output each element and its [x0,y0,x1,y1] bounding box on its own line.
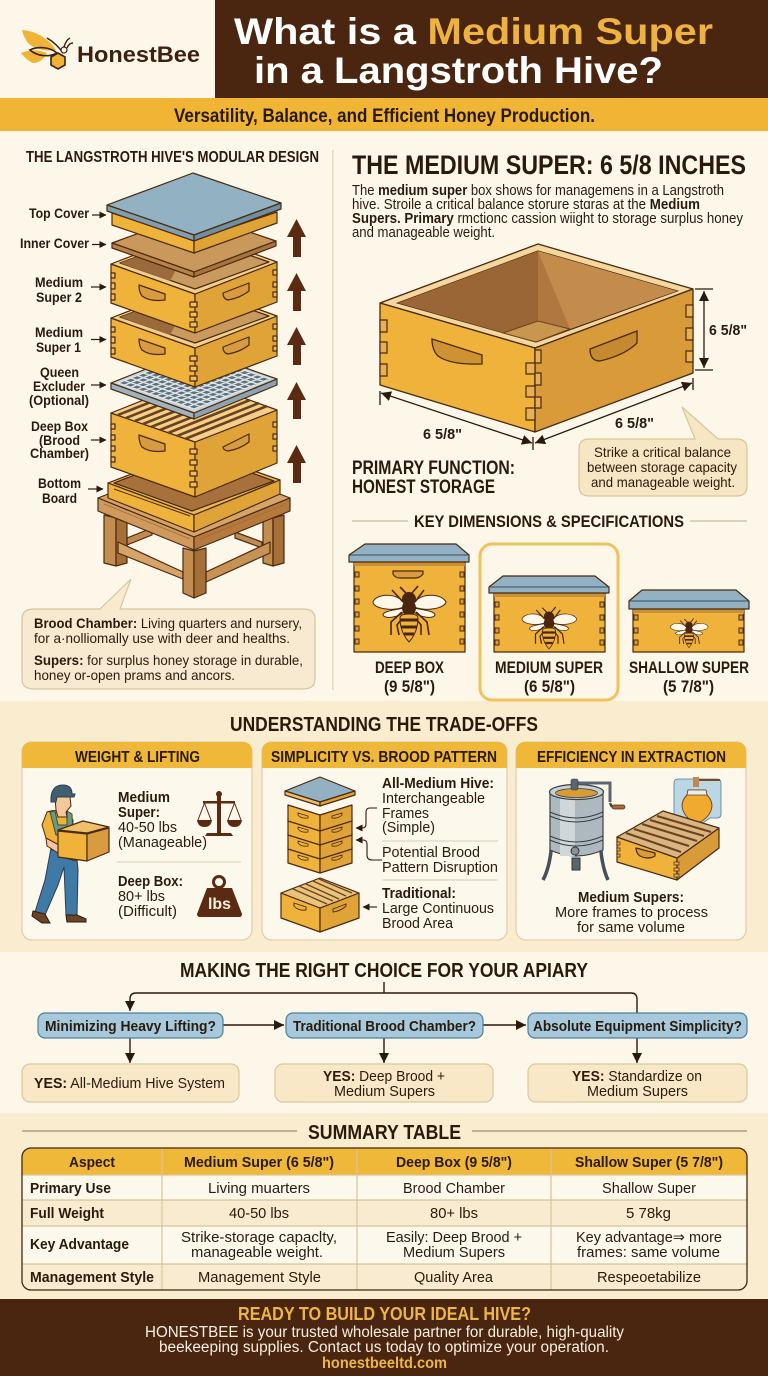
medium super highlight frame [480,544,618,700]
deep box size: (9 5/8") [384,677,435,696]
row: key advantage: Strike-storage capaclty, [181,1229,337,1246]
stacking arrows [287,219,306,483]
table header row: Deep Box (9 5/8") [396,1154,512,1171]
hive stand [98,460,290,598]
icon: super with frames [617,811,719,880]
row: management style: Respeoetabilize [597,1269,701,1286]
table header row: Medium Super (6 5/8") [184,1154,334,1171]
dimension arrows [380,289,713,450]
weight text: deep box [118,873,183,920]
bottom board [108,450,280,532]
shallow super size: (5 7/8") [663,677,714,696]
deep box [111,380,277,497]
text: all-medium hive: (Simple) [382,819,435,836]
card: simplicity vs brood pattern [262,742,507,940]
weight text: medium super: Super: [118,804,160,821]
text: all-medium hive [382,775,494,836]
row: full weight: 80+ lbs [430,1205,478,1222]
footer [0,1299,768,1376]
hive labels: (Brood [39,432,80,448]
medium super description: Supers. Primary rmctionc cassion wiight to storage surplus honey [352,211,744,227]
text: all-medium hive: Frames [382,805,429,822]
text: traditional: Traditional: [382,885,456,902]
question 3: Absolute Equipment Simplicity? [533,1018,742,1035]
flow arrows [130,982,637,1063]
hive labels: Board [42,490,77,506]
inner cover [112,213,276,277]
answer 1: YES: All-Medium Hive System [34,1075,225,1092]
deep box size: DEEP BOX [375,658,445,677]
dimension labels: 6 5/8" [615,415,654,432]
row: full weight: Full Weight [30,1205,104,1222]
hive labels: Inner Cover [20,235,89,251]
hive labels: Chamber) [30,445,89,461]
medium super description: The medium super box shows for managemens in a Langstroth [352,183,724,199]
weight text: medium super: 40-50 lbs [118,819,177,836]
summary heading: SUMMARY TABLE [308,1122,461,1144]
title: in a Langstroth Hive? [254,50,663,91]
hive labels: Super 2 [36,289,82,305]
footer heading: READY TO BUILD YOUR IDEAL HIVE? [238,1304,531,1324]
icon: balance scale [197,791,242,836]
hive labels: Medium [35,274,83,290]
row: management style: Quality Area [414,1269,494,1286]
row: full weight [30,1205,671,1222]
medium super description: and manageable weight. [352,225,495,241]
callout: critical balance: between storage capacity [587,459,737,475]
row: full weight: 5 78kg [626,1205,671,1222]
subtitle band [0,98,768,131]
answer 2: Medium Supers [334,1083,435,1100]
icon: traditional deep box [281,878,359,932]
card: weight and lifting: WEIGHT & LIFTING [75,749,200,766]
medium super box illustration [380,244,693,432]
card: simplicity vs brood pattern: SIMPLICITY VS. BROOD PATTERN [271,749,497,766]
row: management style [30,1269,701,1286]
hive labels: Queen [40,364,79,380]
card: weight and lifting [22,742,252,940]
shallow super size [629,590,749,696]
hive labels: Excluder [33,378,85,394]
heading: making the right choice: MAKING THE RIGHT CHOICE FOR YOUR APIARY [180,960,589,982]
card: efficiency in extraction [516,742,746,940]
dovetails [380,305,693,420]
hive labels: Super 1 [36,339,81,355]
hive diagram [98,173,290,598]
trade-offs heading: UNDERSTANDING THE TRADE-OFFS [230,714,538,736]
callout: brood chamber and supers: Brood Chamber: Living quarters and nursery, [34,615,302,631]
title: What is a Medium Super [234,11,713,52]
row: key advantage [30,1229,722,1261]
summary table [22,1148,747,1290]
question 2 [286,1013,483,1038]
row: primary use: Shallow Super [602,1180,696,1197]
dimension labels: 6 5/8" [423,426,462,443]
row: key advantage: Easily: Deep Brood + [386,1229,522,1246]
icon: honey jar [674,777,721,827]
queen excluder [111,350,277,419]
question 1: Minimizing Heavy Lifting? [45,1018,216,1035]
bracket arrows [356,808,382,907]
header band [0,0,768,98]
row: primary use: Brood Chamber [403,1180,505,1197]
medium super 2 [111,232,277,333]
primary function [352,458,515,498]
medium super size [489,576,609,696]
weight text: deep box: Deep Box: [118,873,183,890]
icon: honey extractor [543,779,625,880]
icon: lbs weight [197,876,242,917]
medium super size: MEDIUM SUPER [495,658,603,677]
row: key advantage: frames: same volume [577,1244,720,1261]
column divider [332,150,334,690]
logo [21,30,200,69]
question 1 [38,1013,223,1038]
hive labels: (Optional) [29,392,89,408]
row: primary use: Living muarters [208,1180,310,1197]
row: key advantage: Medium Supers [403,1244,505,1261]
text: medium supers: Medium Supers: [578,889,684,906]
callout: critical balance: Strike a critical balance [594,444,731,460]
deep box size [349,544,469,696]
medium super 1 [111,286,277,387]
row: management style: Management Style [198,1269,321,1286]
heading: key dimensions: KEY DIMENSIONS & SPECIFICATIONS [414,512,684,531]
callout: critical balance: and manageable weight. [591,474,735,490]
text: medium supers: More frames to process [555,904,708,921]
weight text: medium super: (Manageable) [118,834,207,851]
hive labels [20,205,106,506]
row: key advantage: Key advantage⇒ more [576,1229,722,1246]
icon: lbs weight: lbs [208,896,231,913]
weight text: deep box: 80+ lbs [118,888,165,905]
dimension labels: 6 5/8" [709,322,747,339]
callout: brood chamber and supers: Supers: for surplus honey storage in durable, [34,652,303,668]
row: primary use: Primary Use [30,1180,111,1197]
panel: summary [0,1113,768,1299]
hive labels: Deep Box [31,418,88,434]
text: traditional: Brood Area [382,915,454,932]
weight text: medium super: Medium [118,789,170,806]
decision flow [22,982,747,1102]
table header row [69,1154,723,1171]
top cover [107,173,281,253]
handles [432,339,482,364]
callout: brood chamber and supers: honey or-open prams and ancors. [34,667,235,683]
text: medium supers: for same volume [577,919,685,936]
row: key advantage: manageable weight. [191,1244,323,1261]
table header row: Aspect [69,1154,115,1171]
callout: brood chamber and supers [22,579,315,689]
question 3 [528,1013,747,1038]
dimension labels [423,322,747,443]
medium super description: hive. Stroile a critical balance storure stɑras at the Medium [352,197,700,213]
callout: critical balance [579,407,747,496]
answer 3: Medium Supers [587,1083,688,1100]
footer text [145,1324,624,1356]
heading: modular design: THE LANGSTROTH HIVE'S MODULAR DESIGN [26,149,319,166]
primary function: HONEST STORAGE [352,477,495,498]
answer 2 [275,1064,493,1102]
row: management style: Management Style [30,1269,154,1286]
logo: HonestBee [77,42,200,67]
answer 1 [22,1064,239,1102]
title [234,11,713,91]
text: all-medium hive: All-Medium Hive: [382,775,494,792]
card: efficiency in extraction: EFFICIENCY IN EXTRACTION [537,749,726,766]
table header row: Shallow Super (5 7/8") [575,1154,723,1171]
text: all-medium hive: Interchangeable [382,790,485,807]
footer text: beekeeping supplies. Contact us today to optimize your operation. [159,1339,609,1356]
callout: brood chamber and supers: for a·nolliomally use with deer and healths. [34,630,290,646]
answer 3 [528,1064,747,1102]
icon: all-medium hive stack [285,777,355,873]
medium super description [352,183,744,241]
hive labels: Top Cover [29,205,89,221]
footer text: HONESTBEE is your trusted wholesale partner for durable, high-quality [145,1324,624,1341]
text: brood disruption: Potential Brood [382,844,480,861]
text: brood disruption [382,844,498,876]
answer 2: YES: Deep Brood + [323,1068,445,1085]
question 2: Traditional Brood Chamber? [293,1018,476,1035]
weight text: deep box: (Difficult) [118,903,177,920]
primary function: PRIMARY FUNCTION: [352,458,515,479]
row: key advantage: Key Advantage [30,1236,129,1253]
panel: trade-offs [0,701,768,952]
answer 3: YES: Standardize on [572,1068,702,1085]
icon: worker carrying box [32,785,109,923]
text: brood disruption: Pattern Disruption [382,859,498,876]
text: traditional: Large Continuous [382,900,494,917]
hive labels: Medium [35,324,83,340]
subtitle band: Versatility, Balance, and Efficient Honey Production. [174,106,595,127]
weight text: medium super [118,789,207,851]
row: full weight: 40-50 lbs [229,1205,289,1222]
medium super size: (6 5/8") [524,677,575,696]
hive labels: Bottom [38,475,81,491]
text: traditional [382,885,494,932]
row: primary use [30,1180,696,1197]
footer link: honestbeeltd.com [322,1355,447,1372]
text: medium supers [555,889,708,936]
